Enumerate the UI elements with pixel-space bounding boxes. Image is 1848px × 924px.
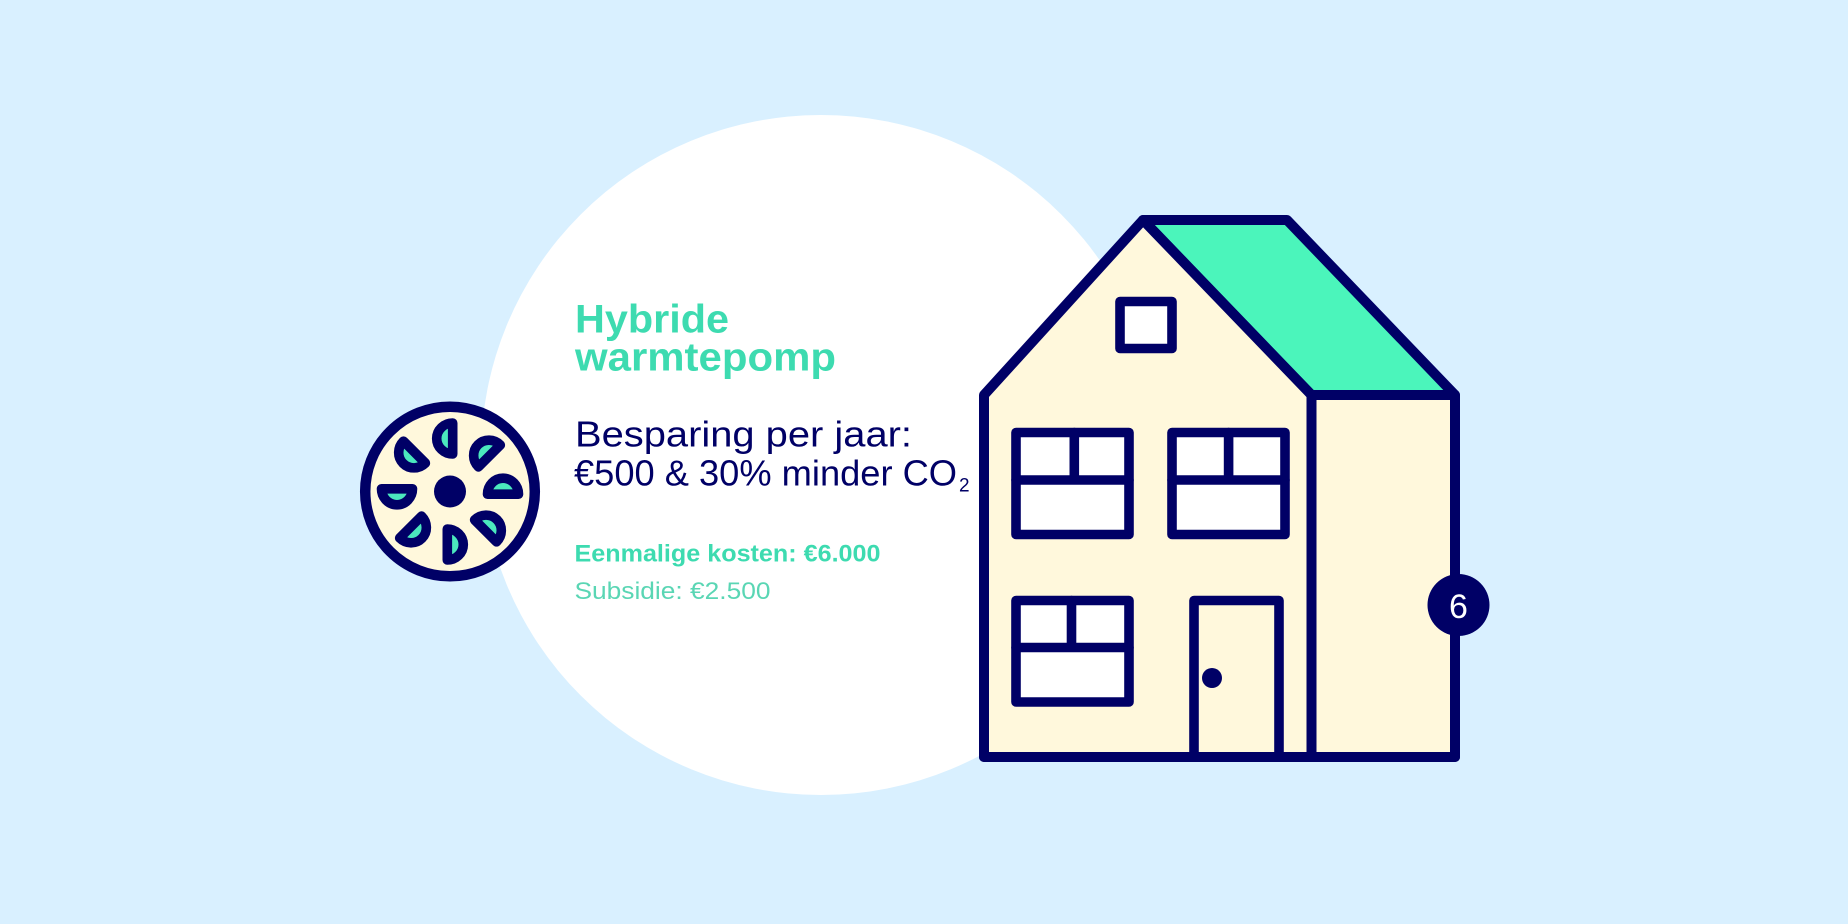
roof xyxy=(1143,220,1455,395)
title: warmtepomp xyxy=(574,336,836,380)
savings text: 2 xyxy=(959,476,970,496)
fan blades xyxy=(382,423,518,560)
number badge xyxy=(1428,574,1490,636)
window lower left xyxy=(1016,600,1129,702)
savings text: €500 & 30% minder CO xyxy=(574,452,957,494)
house illustration xyxy=(984,220,1455,757)
fan housing xyxy=(365,407,535,576)
window upper left xyxy=(1016,432,1129,534)
subsidy: Subsidie: €2.500 xyxy=(574,578,770,605)
window upper right xyxy=(1172,432,1285,534)
side wall xyxy=(1312,395,1455,757)
white circle panel xyxy=(481,115,1161,795)
ground line xyxy=(984,752,1455,762)
badge number: 6 xyxy=(1449,588,1468,626)
one-off costs: Eenmalige kosten: €6.000 xyxy=(574,540,880,568)
front wall xyxy=(984,220,1312,757)
text block xyxy=(574,298,970,605)
fan hub xyxy=(434,476,466,508)
door knob xyxy=(1202,668,1222,688)
attic window xyxy=(1120,302,1172,348)
savings text: Besparing per jaar: xyxy=(575,414,912,454)
icon: heat pump fan xyxy=(365,407,535,576)
door xyxy=(1194,600,1279,757)
badge circle xyxy=(1428,574,1490,636)
title: Hybride xyxy=(575,298,729,342)
